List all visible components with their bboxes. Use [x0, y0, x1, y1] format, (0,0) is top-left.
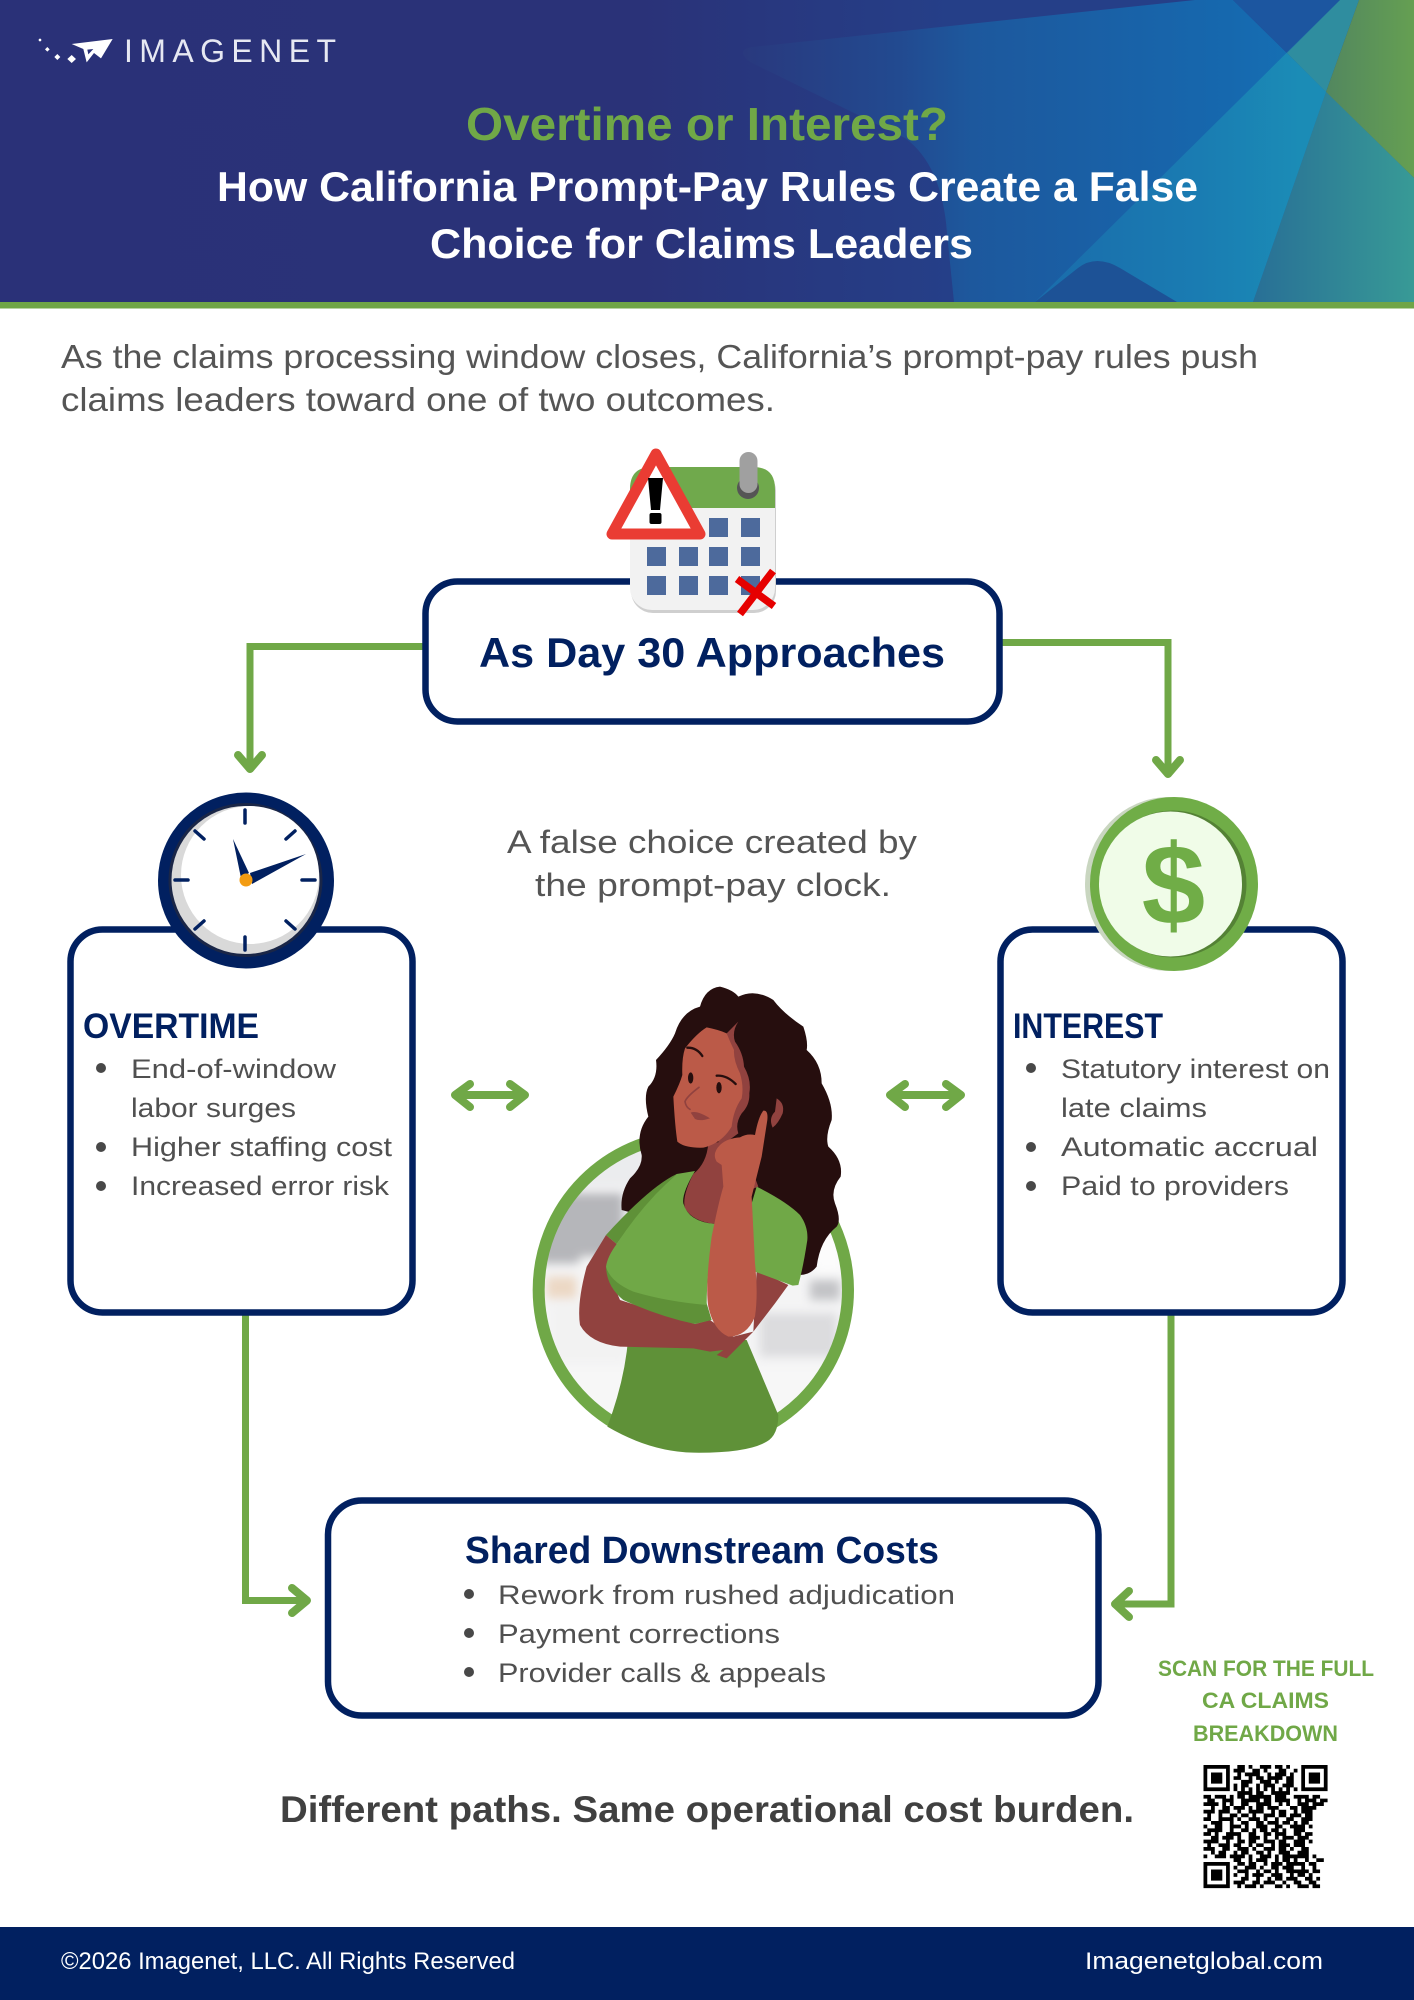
panel: interest: Paid to providers — [1061, 1171, 1289, 1201]
raised arm and hand — [707, 1111, 767, 1337]
footer bar: Imagenetglobal.com — [1085, 1948, 1323, 1975]
folded arm — [579, 1235, 788, 1358]
panel: as day 30 approaches: As Day 30 Approaches — [479, 629, 945, 676]
panel: interest: Automatic accrual — [1061, 1132, 1318, 1162]
title: How California Prompt-Pay Rules Create a False — [217, 163, 1198, 210]
ear — [771, 1098, 783, 1128]
title — [217, 98, 1198, 267]
illustration: thinking woman — [533, 987, 853, 1453]
title: Overtime or Interest? — [466, 98, 948, 150]
icon: dollar coin: $ — [1142, 822, 1205, 949]
photo background — [544, 1151, 842, 1372]
neck — [684, 1140, 758, 1224]
sleeve shadow — [606, 1174, 677, 1244]
panel: interest — [1000, 797, 1342, 1312]
center caption: the prompt-pay clock. — [535, 867, 891, 903]
panel: overtime: Increased error risk — [131, 1171, 390, 1201]
panel: overtime: End-of-window — [131, 1054, 337, 1084]
qr callout heading: CA CLAIMS — [1202, 1688, 1329, 1713]
panel: shared downstream costs: Payment corrections — [498, 1619, 780, 1649]
center caption — [507, 824, 917, 903]
arrow: double left — [455, 1084, 525, 1107]
arrow: day 30 to interest — [1001, 642, 1180, 774]
panel: interest: INTEREST — [1013, 1007, 1163, 1046]
arrow: double right — [890, 1084, 961, 1107]
icon: clock — [158, 792, 334, 968]
qr code — [1204, 1765, 1328, 1888]
panel: overtime: Higher staffing cost — [131, 1132, 393, 1162]
panel: overtime — [70, 792, 412, 1312]
intro text: claims leaders toward one of two outcomes. — [61, 381, 775, 418]
footer bar — [0, 1927, 1414, 2000]
hair — [621, 987, 841, 1275]
icon: calendar with warning — [612, 452, 776, 614]
panel: overtime: OVERTIME — [83, 1007, 259, 1046]
panel: shared downstream costs: Provider calls & appeals — [498, 1658, 826, 1688]
logo: Imagenet: IMAGENET — [124, 33, 336, 69]
arrow: interest to shared costs — [1115, 1314, 1171, 1617]
face — [707, 1022, 750, 1147]
footer bar: ©2026 Imagenet, LLC. All Rights Reserved — [61, 1948, 515, 1975]
title: Choice for Claims Leaders — [430, 220, 973, 267]
takeaway statement: Different paths. Same operational cost burden. — [280, 1789, 1134, 1830]
icon: dollar coin — [1085, 797, 1258, 971]
qr callout heading: SCAN FOR THE FULL — [1158, 1656, 1374, 1681]
center caption: A false choice created by — [507, 824, 917, 860]
arrow: overtime to shared costs — [246, 1314, 307, 1613]
torso — [607, 1337, 778, 1453]
panel: shared downstream costs: Shared Downstream Costs — [465, 1530, 939, 1572]
panel: interest: late claims — [1061, 1093, 1207, 1123]
qr callout heading — [1158, 1656, 1374, 1746]
panel: as day 30 approaches — [426, 582, 1000, 722]
panel: interest: Statutory interest on — [1061, 1054, 1330, 1084]
panel: overtime: labor surges — [131, 1093, 296, 1123]
intro text — [61, 338, 1258, 418]
ring — [539, 1135, 848, 1445]
intro text: As the claims processing window closes, California’s prompt-pay rules push — [61, 338, 1258, 375]
header banner — [0, 0, 1414, 302]
panel: shared downstream costs: Rework from rushed adjudication — [498, 1580, 955, 1610]
shirt — [606, 1171, 715, 1305]
panel: shared downstream costs — [328, 1500, 1098, 1716]
arrow: day 30 to overtime — [238, 646, 424, 770]
qr callout heading: BREAKDOWN — [1193, 1721, 1338, 1746]
header green rule — [0, 302, 1414, 308]
facial features — [685, 1048, 736, 1109]
